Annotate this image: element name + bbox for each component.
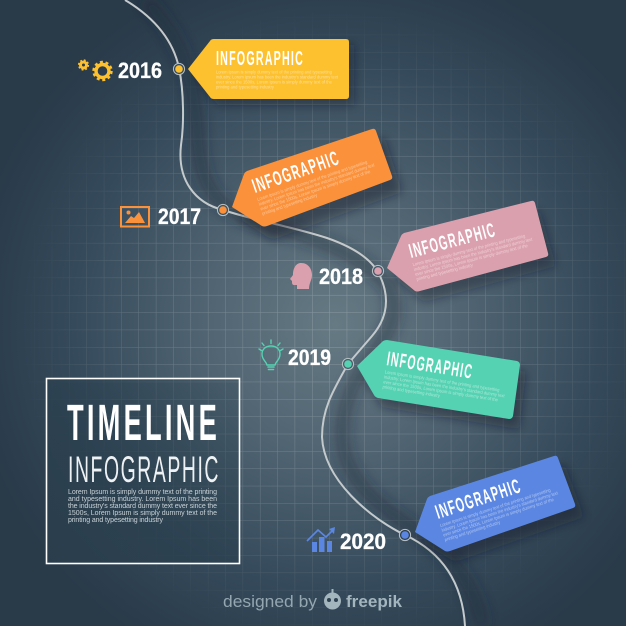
tag 2016 — [188, 39, 354, 105]
tag text: Lorem Ipsum is simply dummy text of the printing and typesetting — [216, 70, 332, 74]
description: the industry's standard dummy text ever since the — [68, 503, 217, 510]
tag text: Lorem Ipsum is simply dummy text of the printing and typesetting — [412, 233, 526, 267]
tag shape — [387, 201, 548, 292]
tag text: ever since the 1500s, Lorem Ipsum is simply dummy text of the — [442, 497, 555, 538]
tag shadow — [194, 45, 354, 105]
tag shadow — [394, 211, 556, 302]
tag text: ever since the 1500s, Lorem Ipsum is simply dummy text of the — [415, 243, 529, 277]
tag text: Lorem Ipsum is simply dummy text of the printing and typesetting — [256, 159, 368, 202]
tag text: ever since the 1500s, Lorem Ipsum is simply dummy text of the — [260, 169, 371, 211]
panel: title box — [46, 378, 240, 564]
tag 2018 — [387, 201, 556, 302]
description: and typesetting industry. Lorem Ipsum has been — [68, 496, 217, 503]
year 2017: 2017 — [158, 204, 201, 229]
tag text — [407, 211, 536, 282]
tag text: printing and typesetting industry — [416, 262, 474, 282]
marker 2018 — [372, 265, 384, 277]
tag shadow — [422, 465, 584, 562]
tag text: industry. Lorem Ipsum has been the industry's standard dummy text — [441, 490, 559, 533]
tag text: INFOGRAPHIC — [249, 147, 343, 198]
tag text: INFOGRAPHIC — [385, 348, 475, 384]
tag shape — [357, 340, 520, 419]
tag text — [249, 137, 379, 216]
tag shadow — [364, 350, 526, 429]
tag text: industry. Lorem Ipsum has been the industry's standard dummy text — [413, 236, 533, 272]
tag 2019 — [357, 340, 526, 429]
tag shape — [232, 129, 392, 226]
tag text: Lorem Ipsum is simply dummy text of the printing and typesetting — [385, 369, 500, 393]
heading: infographic: INFOGRAPHIC — [68, 449, 220, 490]
tag shape — [188, 39, 349, 99]
timeline curve shadow — [145, 0, 482, 626]
tag text: ever since the 1500s, Lorem Ipsum is simply dummy text of the — [216, 80, 332, 84]
year 2020: 2020 — [340, 529, 386, 554]
tag text: industry. Lorem Ipsum has been the industry's standard dummy text — [216, 74, 339, 80]
timeline curve — [125, 0, 465, 626]
tag text: industry. Lorem Ipsum has been the industry's standard dummy text — [258, 162, 376, 207]
description: Lorem Ipsum is simply dummy text of the printing — [68, 489, 217, 496]
icon: gears — [79, 60, 112, 80]
tag text: industry. Lorem Ipsum has been the industry's standard dummy text — [384, 374, 506, 399]
marker 2017 — [217, 204, 229, 216]
tag text: INFOGRAPHIC — [407, 219, 498, 263]
heading: timeline: TIMELINE — [67, 394, 220, 451]
marker 2020 — [399, 529, 411, 541]
tag text: ever since the 1500s, Lorem Ipsum is simply dummy text of the — [383, 379, 499, 402]
icon: head — [290, 263, 312, 289]
tag text — [382, 348, 510, 408]
footer credit: freepik — [346, 592, 403, 611]
description: printing and typesetting industry — [68, 517, 164, 524]
icon: growth chart — [307, 527, 335, 552]
tag text: printing and typesetting industry — [382, 384, 441, 398]
tag shape — [415, 456, 575, 552]
tag text: INFOGRAPHIC — [433, 475, 524, 524]
tag shadow — [240, 138, 402, 240]
tag text: printing and typesetting industry — [261, 192, 318, 216]
tag text — [433, 465, 562, 542]
tag text: INFOGRAPHIC — [216, 48, 304, 70]
tag text: printing and typesetting industry — [216, 84, 275, 90]
tag 2020 — [415, 456, 584, 562]
icon: light bulb — [259, 340, 283, 370]
tag text: Lorem Ipsum is simply dummy text of the printing and typesetting — [439, 487, 552, 528]
year 2019: 2019 — [288, 345, 331, 370]
tag text — [216, 48, 339, 90]
description — [68, 489, 217, 524]
tag text: printing and typesetting industry — [444, 519, 501, 542]
footer credit: designed by — [223, 592, 318, 611]
footer credit — [223, 589, 403, 611]
icon: picture — [121, 207, 149, 226]
year 2016: 2016 — [118, 58, 162, 83]
year 2018: 2018 — [319, 264, 363, 289]
marker 2019 — [342, 358, 354, 370]
marker 2016 — [173, 63, 185, 75]
tag 2017 — [232, 129, 402, 240]
icon: freepik mascot — [324, 589, 341, 610]
description: 1500s, Lorem Ipsum is simply dummy text of the — [68, 510, 217, 517]
